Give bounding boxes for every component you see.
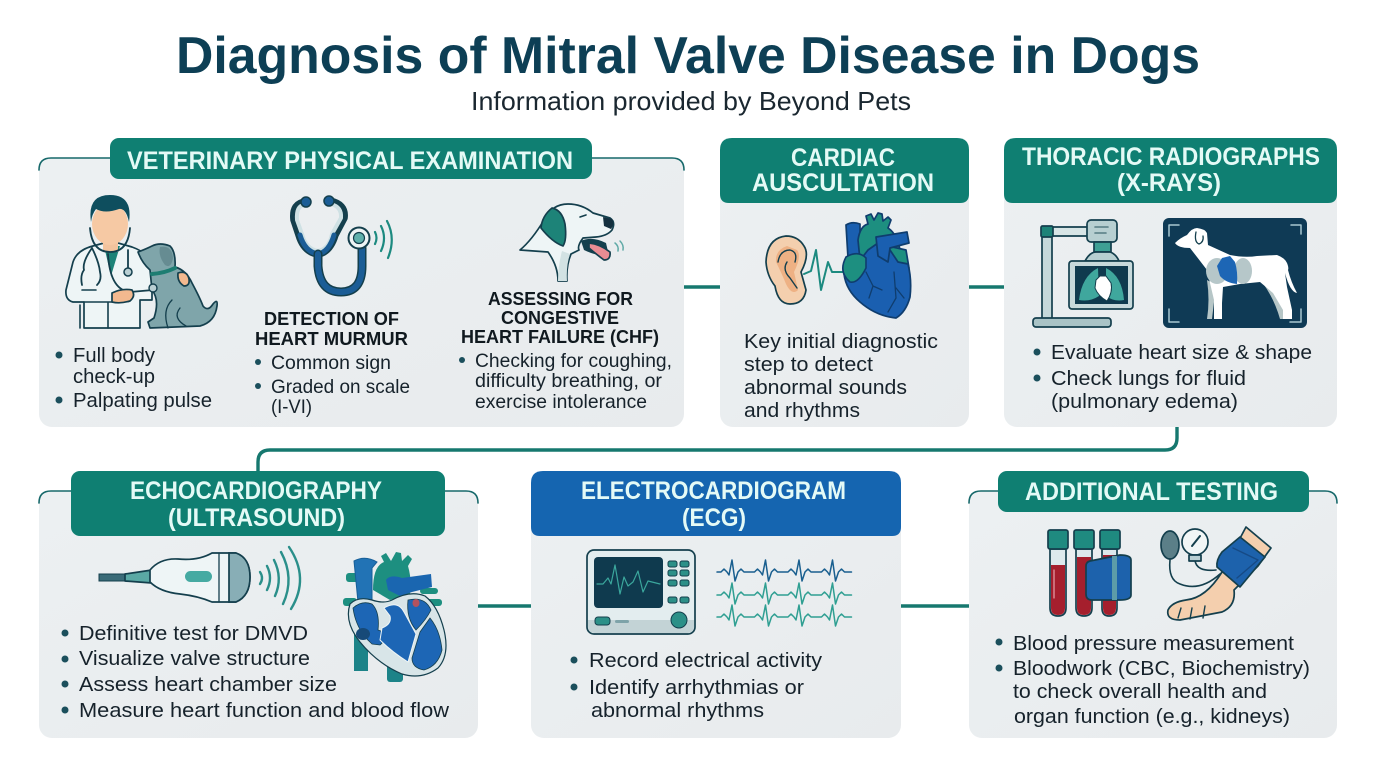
icon: dog x-ray image <box>1163 218 1307 328</box>
text: assessing for congestive heart failure: ASSESSING FOR <box>488 288 633 309</box>
text: assessing for congestive heart failure <box>459 288 672 413</box>
text: echocardiography bullets <box>62 622 449 722</box>
text: full body check-up: check-up <box>73 365 155 388</box>
text: ECG bullets: Record electrical activity <box>589 649 823 672</box>
text: full body check-up <box>56 344 212 412</box>
text: radiograph bullets: (pulmonary edema) <box>1051 390 1238 413</box>
icon: veterinarian with dog <box>66 195 217 328</box>
text: detection of heart murmur: HEART MURMUR <box>255 328 408 349</box>
text: key initial diagnostic step: and rhythms <box>744 399 860 422</box>
header <box>110 138 592 179</box>
header: (X-RAYS) <box>1117 169 1221 197</box>
text: assessing for congestive heart failure: difficulty breathing, or <box>475 370 663 392</box>
icon: blood pressure cuff on paw <box>1161 527 1271 620</box>
header <box>71 471 445 536</box>
icon: x-ray machine <box>1033 220 1133 327</box>
icon: ear and heart <box>766 213 911 318</box>
header: VETERINARY PHYSICAL EXAMINATION <box>127 147 573 175</box>
text: echocardiography bullets: Measure heart function and blood flow <box>79 699 449 722</box>
panel: electrocardiogram <box>531 471 901 738</box>
text: detection of heart murmur: (I-VI) <box>271 396 312 418</box>
header: CARDIAC <box>791 144 895 172</box>
icon: ECG monitor <box>587 550 695 634</box>
title: Diagnosis of Mitral Valve Disease in Dogs <box>176 27 1200 85</box>
text: ECG bullets <box>570 649 823 722</box>
panel: veterinary physical examination <box>39 138 684 427</box>
text: echocardiography bullets: Assess heart chamber size <box>79 673 337 696</box>
panel: echocardiography <box>39 471 478 738</box>
header: THORACIC RADIOGRAPHS <box>1022 143 1320 171</box>
text: additional testing bullets: to check overall health and <box>1013 680 1267 703</box>
text: additional testing bullets <box>996 632 1310 728</box>
arrow: echocardiography to ECG <box>478 604 531 608</box>
text: echocardiography bullets: Visualize valve structure <box>79 647 310 670</box>
icon: heart cross-section <box>343 552 446 682</box>
text: detection of heart murmur <box>255 308 410 418</box>
header: ECHOCARDIOGRAPHY <box>130 477 382 505</box>
header <box>720 138 969 203</box>
text: assessing for congestive heart failure: CONGESTIVE <box>501 307 619 328</box>
icon: stethoscope <box>294 196 392 292</box>
text: radiograph bullets <box>1034 341 1312 413</box>
panel: cardiac auscultation <box>720 138 969 427</box>
text: key initial diagnostic step: step to detect <box>744 353 873 376</box>
header: (ULTRASOUND) <box>168 504 345 532</box>
text: assessing for congestive heart failure: Checking for coughing, <box>475 350 672 372</box>
arrow: auscultation to radiographs <box>969 285 1004 289</box>
subtitle: Information provided by Beyond Pets <box>471 86 911 116</box>
arrow: ECG to additional testing <box>901 604 969 608</box>
text: detection of heart murmur: Graded on scale <box>271 376 410 398</box>
text: key initial diagnostic step: Key initial diagnostic <box>744 330 938 353</box>
arrow: examination to auscultation <box>684 285 720 289</box>
icon: blood tubes <box>1048 530 1131 616</box>
panel: additional testing <box>969 471 1337 738</box>
text: radiograph bullets: Evaluate heart size & shape <box>1051 341 1312 364</box>
text: detection of heart murmur: DETECTION OF <box>264 308 399 329</box>
header: AUSCULTATION <box>752 169 934 197</box>
panel: thoracic radiographs <box>1004 138 1337 427</box>
header: ELECTROCARDIOGRAM <box>581 477 846 505</box>
header: (ECG) <box>682 504 746 532</box>
text: key initial diagnostic step: abnormal sounds <box>744 376 907 399</box>
text: full body check-up: Palpating pulse <box>73 389 212 412</box>
icon: ultrasound probe <box>99 547 300 609</box>
header <box>998 471 1309 512</box>
header: ADDITIONAL TESTING <box>1025 478 1278 506</box>
text: key initial diagnostic step <box>744 330 938 422</box>
arrow: radiographs to echocardiography <box>258 427 1177 471</box>
text: assessing for congestive heart failure: exercise intolerance <box>475 391 647 413</box>
text: ECG bullets: abnormal rhythms <box>591 699 764 722</box>
header <box>1004 138 1337 203</box>
text: full body check-up: Full body <box>73 344 156 367</box>
text: radiograph bullets: Check lungs for fluid <box>1051 367 1246 390</box>
text: additional testing bullets: Bloodwork (CBC, Biochemistry) <box>1013 657 1310 680</box>
text: detection of heart murmur: Common sign <box>271 352 391 374</box>
header <box>531 471 901 536</box>
text: assessing for congestive heart failure: HEART FAILURE (CHF) <box>461 326 659 347</box>
text: ECG bullets: Identify arrhythmias or <box>589 676 804 699</box>
icon: panting dog head <box>520 204 623 281</box>
text: echocardiography bullets: Definitive test for DMVD <box>79 622 308 645</box>
text: additional testing bullets: Blood pressure measurement <box>1013 632 1294 655</box>
text: additional testing bullets: organ function (e.g., kidneys) <box>1014 705 1290 728</box>
chart: ECG traces <box>717 560 852 626</box>
